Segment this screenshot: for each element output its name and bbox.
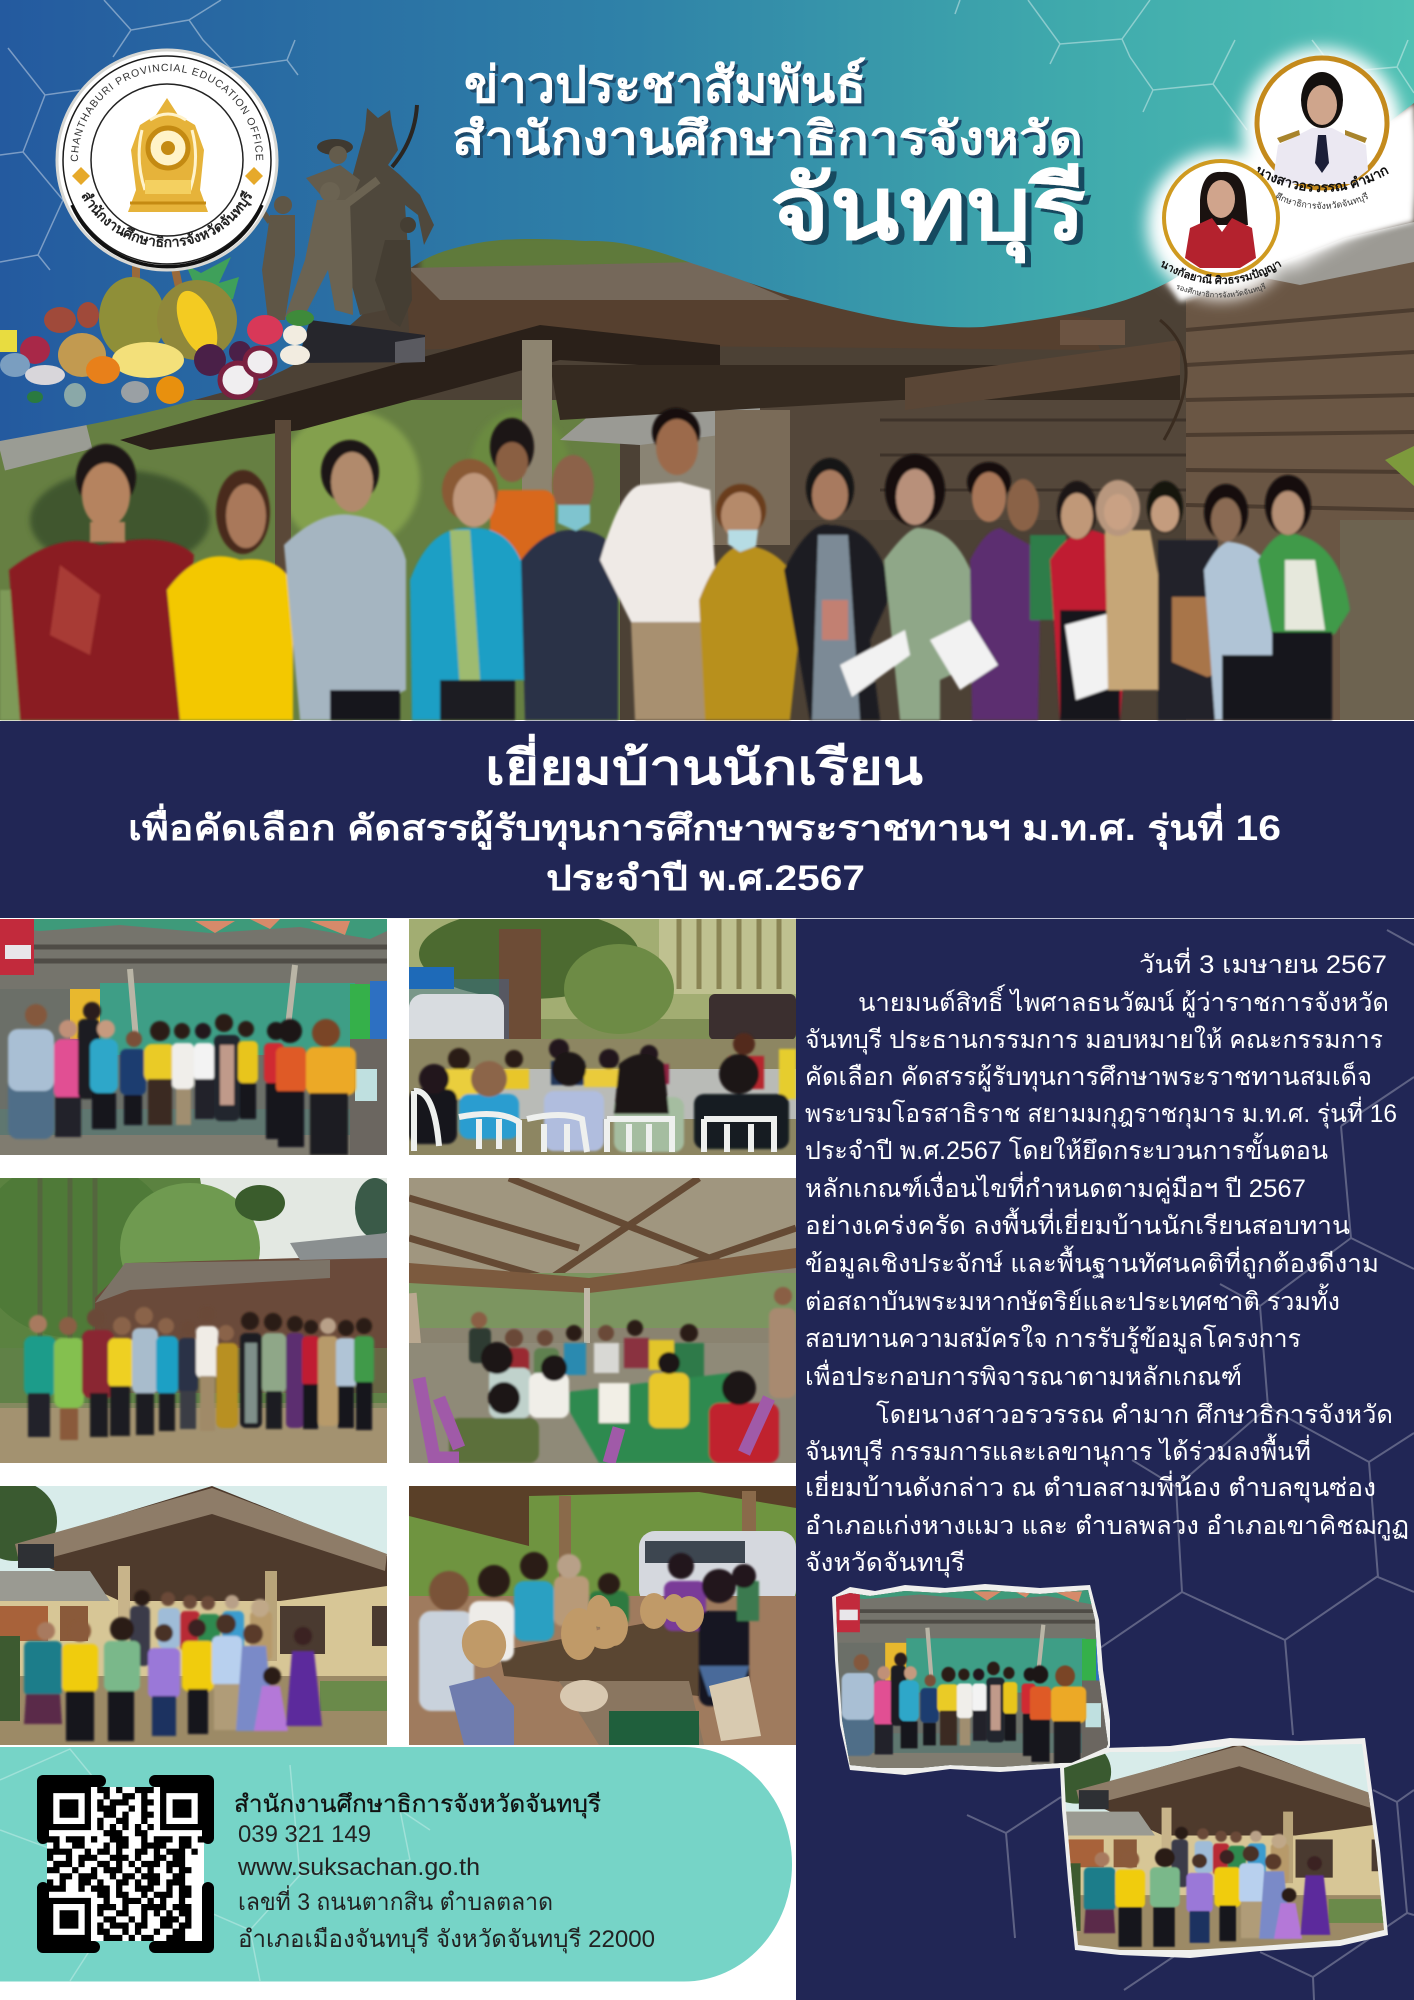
article text: เพื่อประกอบการพิจารณาตามหลักเกณฑ์: [805, 1359, 1242, 1391]
portrait role: รองศึกษาธิการจังหวัดจันทบุรี: [1176, 282, 1266, 298]
sub-headline line 2: ประจำปี พ.ศ.2567: [546, 859, 865, 898]
headline band: [0, 721, 1414, 918]
footer: phone: 039 321 149: [238, 1821, 371, 1848]
portrait glow: [1147, 48, 1414, 299]
article text: จังหวัดจันทบุรี: [805, 1549, 965, 1578]
rider: [306, 139, 360, 205]
article text: ข้อมูลเชิงประจักษ์ และพื้นฐานทัศนคติที่ถูกต้องดีงาม: [805, 1245, 1379, 1279]
portrait role: ศึกษาธิการจังหวัดจันทบุรี: [1276, 192, 1368, 209]
article text: ประจำปี พ.ศ.2567 โดยให้ยึดกระบวนการขั้นตอน: [805, 1132, 1328, 1165]
hexagon pattern in right panel: [967, 930, 1414, 2000]
sub-headline line 1: เพื่อคัดเลือก คัดสรรผู้รับทุนการศึกษาพระราชทานฯ ม.ท.ศ. รุ่นที่ 16: [128, 803, 1281, 850]
front soldier: [285, 200, 353, 317]
article text: โดยนางสาวอรวรรณ คำมาก ศึกษาธิการจังหวัด: [876, 1400, 1393, 1429]
person: black shirt with tan bag: [1147, 481, 1242, 720]
article text: วันที่ 3 เมษายน 2567: [1139, 947, 1387, 979]
footer: website: www.suksachan.go.th: [237, 1854, 480, 1881]
left soldier: [262, 215, 295, 320]
article text: สอบทานความสมัครใจ การรับรู้ข้อมูลโครงการ: [805, 1324, 1301, 1354]
article text: จันทบุรี กรรมการและเลขานุการ ได้ร่วมลงพื้นที่: [805, 1433, 1311, 1467]
article text: อย่างเคร่งครัด ลงพื้นที่เยี่ยมบ้านนักเรียนสอบทาน: [805, 1207, 1350, 1240]
person: elderly man in navy shirt: [521, 455, 618, 720]
person: green shirt behind: [1007, 479, 1066, 620]
footer: office name: สำนักงานศึกษาธิการจังหวัดจันทบุรี: [234, 1791, 601, 1819]
article text: หลักเกณฑ์เงื่อนไขที่กำหนดตามคู่มือฯ ปี 2567: [805, 1171, 1306, 1204]
person: student in white shirt: [600, 408, 717, 720]
article text: [805, 947, 1409, 1578]
right soldier: [375, 240, 412, 327]
statue of King Taksin on pedestal: [258, 105, 434, 363]
person: red blouse: [9, 444, 194, 720]
article text: อำเภอแก่งหางแมว และ ตำบลพลวง อำเภอเขาคิชฌกูฏ: [805, 1512, 1409, 1541]
photo 2: meeting under tree: [409, 909, 796, 1155]
title: line 2: สำนักงานศึกษาธิการจังหวัด: [452, 112, 1083, 164]
footer hexagon pattern: [0, 1749, 430, 1981]
title: line 1: ข่าวประชาสัมพันธ์: [464, 57, 866, 113]
photo 5: group at cream house: [0, 1481, 387, 1745]
footer contact panel: [0, 1747, 792, 1982]
article text: เยี่ยมบ้านดังกล่าว ณ ตำบลสามพี่น้อง ตำบลขุนซ่อง: [805, 1470, 1376, 1503]
person: grey-blue shirt: [284, 440, 406, 720]
person: sage green dress: [884, 454, 983, 720]
portrait: deputy officer: [1161, 159, 1282, 298]
portrait name: นางกัลยาณี ศิวธรรมปัญญา: [1161, 261, 1282, 284]
photo 6: table with baskets: [409, 1486, 796, 1745]
footer: address line 1: เลขที่ 3 ถนนตากสิน ตำบลตลาด: [238, 1885, 553, 1916]
person: yellow polo: [167, 470, 293, 720]
right text panel: [796, 918, 1414, 2000]
white swath behind portraits: [1165, 103, 1414, 302]
person: light blue shirt: [1204, 484, 1280, 720]
person: orange shirt behind: [490, 418, 555, 560]
hero photo: group in front of wooden house: [0, 0, 1414, 720]
article text: ต่อสถาบันพระมหากษัตริย์และประเทศชาติ รวมทั้ง: [805, 1283, 1340, 1316]
person: mustard shirt elder: [699, 484, 803, 720]
logo ring text: English: CHANTHABURI PROVINCIAL EDUCATION OFFICE: [70, 64, 264, 162]
portrait: provincial education officer: [1254, 56, 1390, 209]
documents held: [840, 620, 998, 697]
person: turquoise patterned blouse: [410, 459, 527, 720]
logo badge: Chanthaburi Provincial Education Office: [56, 48, 278, 272]
person: purple lace dress: [967, 462, 1040, 720]
article text: พระบรมโอรสาธิราช สยามมกุฎราชกุมาร ม.ท.ศ. รุ่นที่ 16: [805, 1096, 1397, 1129]
document held: [1065, 605, 1148, 700]
photo 3: group at wooden house: [0, 1158, 395, 1463]
article text: นายมนต์สิทธิ์ ไพศาลธนวัฒน์ ผู้ว่าราชการจังหวัด: [858, 984, 1389, 1018]
person: red polo: [1050, 481, 1132, 720]
person: black floral dress: [784, 458, 893, 720]
QR code: [43, 1781, 208, 1947]
title: line 3: จันทบุรี: [770, 159, 1086, 264]
hexagon pattern in header: [0, 0, 1414, 270]
torn photo collage: shop group: [832, 1584, 1110, 1775]
header wave panel: [0, 0, 1414, 441]
horse: [345, 108, 434, 315]
article text: จันทบุรี ประธานกรรมการ มอบหมายให้ คณะกรรมการ: [805, 1025, 1383, 1055]
person: hijab floral: [1096, 480, 1168, 690]
footer: address line 2: อำเภอเมืองจันทบุรี จังหวัดจันทบุรี 22000: [238, 1926, 655, 1954]
torn photo collage: cream house group: [1042, 1738, 1388, 1958]
logo ring text: Thai: สำนักงานศึกษาธิการจังหวัดจันทบุรี: [82, 190, 252, 248]
portrait name: นางสาวอรวรรณ คำมาก: [1258, 166, 1389, 192]
headline: เยี่ยมบ้านนักเรียน: [485, 733, 923, 795]
article text: คัดเลือก คัดสรรผู้รับทุนการศึกษาพระราชทานสมเด็จ: [805, 1061, 1372, 1092]
person: green shirt behind, left edge: [0, 590, 22, 720]
fruit and gemstones: [0, 255, 314, 407]
photo 4: meeting under roof: [402, 1178, 796, 1463]
photo 1: group at shop: [0, 919, 387, 1155]
logo emblem: [128, 98, 208, 212]
person: green sports shirt: [1258, 475, 1350, 720]
